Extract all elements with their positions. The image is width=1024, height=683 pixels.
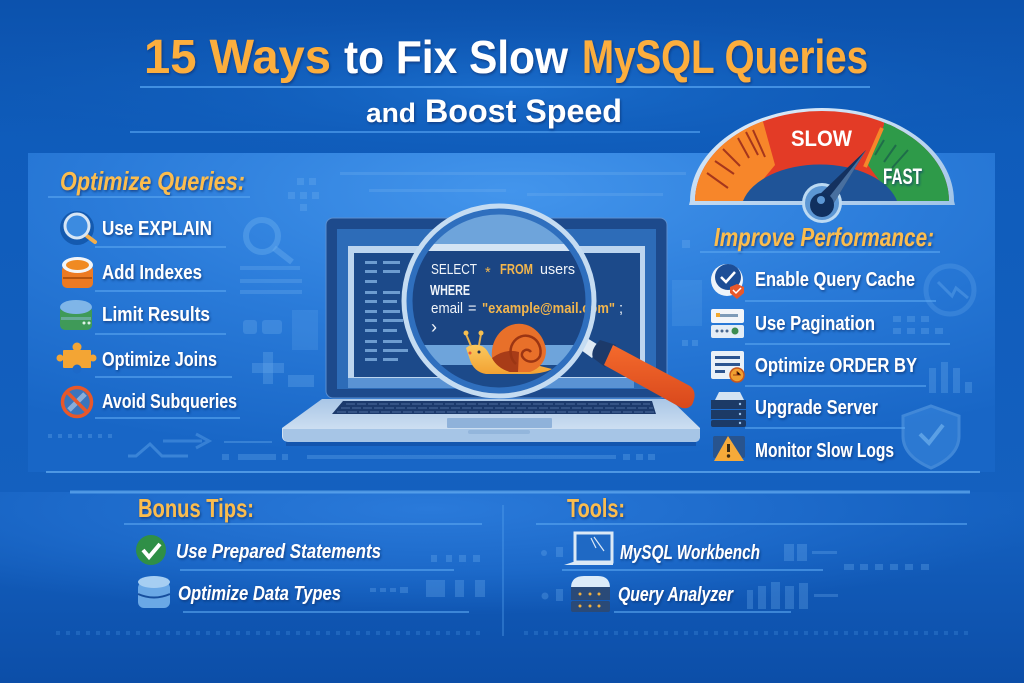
item: enable query cache bbox=[711, 264, 915, 299]
laptop base bbox=[282, 399, 700, 446]
title bbox=[144, 30, 868, 129]
lens rim bbox=[404, 206, 594, 396]
item: limit results: Limit Results bbox=[102, 304, 210, 326]
sql code: ; bbox=[619, 301, 623, 317]
panel: improve performance bbox=[700, 222, 950, 462]
item: upgrade server: Upgrade Server bbox=[755, 397, 878, 419]
item: use prepared statements: Use Prepared Statements bbox=[176, 541, 381, 563]
sql code: › bbox=[431, 317, 437, 337]
item: add indexes: Add Indexes bbox=[102, 262, 202, 284]
snail bbox=[464, 324, 552, 374]
item: optimize joins bbox=[56, 342, 217, 374]
sql code: SELECT bbox=[431, 262, 477, 278]
item: avoid subqueries bbox=[62, 388, 237, 416]
item: upgrade server bbox=[711, 392, 878, 427]
item: optimize data types: Optimize Data Types bbox=[178, 583, 341, 605]
item: avoid subqueries: Avoid Subqueries bbox=[102, 391, 237, 413]
magnifier handle bbox=[581, 338, 695, 408]
decorative ghost shapes bbox=[48, 172, 974, 609]
laptop screen bbox=[326, 218, 667, 398]
heading: improve performance: Improve Performance: bbox=[714, 222, 934, 252]
title: 15 Ways bbox=[144, 31, 331, 84]
sql code: = bbox=[468, 301, 476, 317]
heading: optimize queries: Optimize Queries: bbox=[60, 166, 245, 196]
item: use pagination bbox=[711, 309, 875, 338]
item: use pagination: Use Pagination bbox=[755, 313, 875, 335]
laptop bbox=[282, 218, 700, 446]
item: limit results bbox=[60, 300, 210, 330]
sql code: * bbox=[485, 265, 491, 281]
item: use explain bbox=[60, 211, 212, 245]
item: optimize data types bbox=[138, 576, 341, 608]
speed gauge bbox=[689, 100, 955, 223]
panel: optimize queries bbox=[48, 166, 250, 418]
heading: tools: Tools: bbox=[567, 493, 625, 523]
item: use prepared statements bbox=[136, 535, 381, 565]
item: optimize order by bbox=[711, 351, 918, 382]
speed gauge: SLOW bbox=[791, 126, 852, 151]
item: query analyzer: Query Analyzer bbox=[618, 584, 734, 606]
heading: bonus tips: Bonus Tips: bbox=[138, 493, 254, 523]
item: optimize joins: Optimize Joins bbox=[102, 349, 217, 371]
sql code: "example@mail.com" bbox=[482, 301, 615, 317]
magnifier lens bbox=[404, 206, 623, 396]
sql code bbox=[430, 262, 623, 337]
sql code: email bbox=[431, 301, 463, 317]
item: monitor slow logs bbox=[713, 436, 894, 462]
item: query analyzer bbox=[571, 576, 734, 612]
item: add indexes bbox=[62, 257, 202, 288]
title: Boost Speed bbox=[425, 93, 622, 129]
title: to Fix Slow bbox=[344, 31, 568, 83]
title: and bbox=[366, 98, 416, 128]
sql code: WHERE bbox=[430, 283, 470, 299]
sql code: FROM bbox=[500, 262, 533, 278]
panel: tools bbox=[536, 493, 967, 612]
item: enable query cache: Enable Query Cache bbox=[755, 269, 915, 291]
item: use explain: Use EXPLAIN bbox=[102, 218, 212, 240]
magnifying glass bbox=[124, 206, 967, 612]
panel: bonus tips bbox=[124, 493, 482, 612]
sql code: users bbox=[540, 262, 575, 278]
title: MySQL Queries bbox=[582, 30, 868, 83]
speed gauge: FAST bbox=[883, 164, 922, 189]
item: monitor slow logs: Monitor Slow Logs bbox=[755, 440, 894, 462]
item: mysql workbench: MySQL Workbench bbox=[620, 542, 760, 564]
item: optimize order by: Optimize ORDER BY bbox=[755, 355, 918, 377]
item: mysql workbench bbox=[564, 533, 760, 565]
